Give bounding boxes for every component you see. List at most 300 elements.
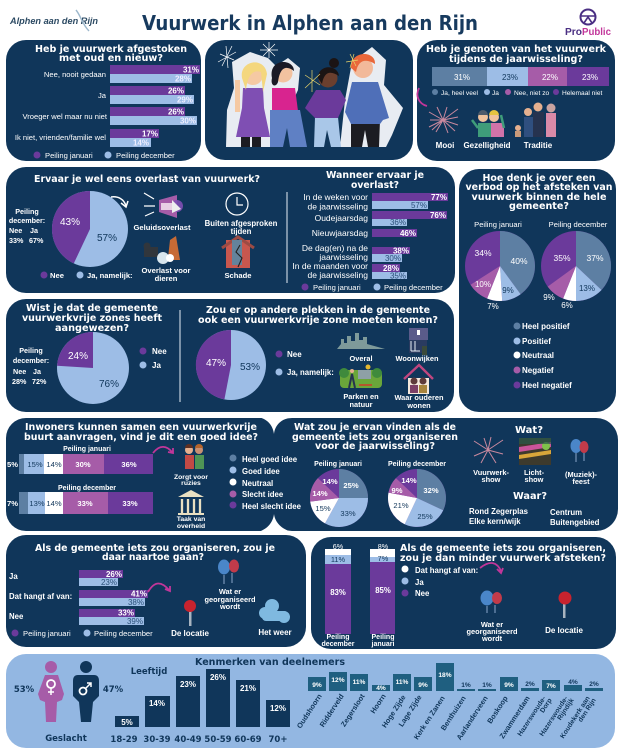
pie chart: januari: 25%	[343, 481, 359, 490]
label: Schade	[224, 271, 252, 280]
stacked column: januari: Peiling	[372, 634, 394, 641]
legend: Positief	[522, 337, 551, 346]
legend: Peiling januari	[313, 283, 361, 292]
note peiling december: 33%	[9, 236, 24, 245]
stacked bar: december: 14%	[46, 499, 62, 508]
legend: Heel negatief	[522, 381, 572, 390]
legend: Ja	[415, 578, 424, 587]
heading: Als de gemeente iets zou organiseren, zou je	[35, 543, 275, 554]
bar chart: kernen: 18%	[438, 672, 452, 679]
note peiling december: 67%	[29, 236, 44, 245]
note peiling december: Nee	[13, 367, 26, 376]
heading	[22, 303, 162, 334]
stacked bar: januari	[7, 446, 153, 474]
bar chart: 26%	[168, 86, 184, 96]
pie chart	[57, 332, 129, 404]
icon: pin	[558, 592, 572, 618]
heading	[400, 543, 606, 564]
label: Overlast voor	[142, 266, 191, 275]
stacked column: januari: 7%	[378, 554, 389, 563]
label: Vuurwerk-	[473, 468, 509, 477]
logo: Alphen aan den Rijn: Alphen aan den Rijn	[9, 16, 98, 27]
labels: kernen: Zwammerdam	[497, 694, 532, 740]
note peiling december: december:	[13, 356, 49, 365]
pie chart: januari: 15%	[315, 504, 331, 513]
bar chart: 26%	[106, 570, 122, 579]
bar chart	[9, 570, 148, 626]
label: De locatie	[171, 629, 209, 638]
panel: verbod	[459, 169, 616, 412]
locations: Centrum	[550, 508, 582, 517]
pie chart: 47%	[206, 358, 226, 369]
stacked column: januari: 85%	[375, 586, 391, 595]
icon: pets	[144, 236, 180, 264]
bar chart: leeftijd: 23%	[180, 680, 196, 689]
label: Zorgt voor	[174, 474, 208, 481]
note peiling december: Peiling	[15, 207, 39, 216]
label: Overal	[349, 354, 373, 363]
bar chart: wanneer: de jaarwisseling	[308, 202, 368, 212]
legend	[12, 629, 153, 638]
legend: Ja, heel veel	[441, 90, 479, 97]
stacked bar: december: 33%	[77, 499, 93, 508]
pie chart: december: Peiling december	[388, 461, 446, 468]
heading: gemeente iets zou organiseren	[292, 432, 458, 443]
legend: Ja	[152, 361, 161, 370]
pie chart	[196, 330, 266, 400]
labels: kernen: Ridderveld	[318, 692, 346, 729]
bar chart: wanneer: 28%	[383, 264, 399, 273]
note peiling december: 28%	[12, 377, 27, 386]
bar chart: wanneer: 77%	[431, 193, 447, 202]
legend: Heel goed idee	[242, 455, 298, 464]
heading: vuurwerkvrije zones heeft	[22, 313, 162, 324]
legend: Dat hangt af van:	[415, 566, 478, 575]
panel: illustration of four people with sparklers	[205, 40, 413, 160]
heading	[24, 422, 258, 443]
legend: Heel slecht idee	[242, 502, 302, 511]
locations: Rond Zegerplas	[469, 507, 529, 516]
bar chart: leeftijd	[110, 669, 290, 745]
pie chart: december: Peiling december	[549, 220, 608, 229]
panel: iets organiseren	[270, 418, 618, 531]
icon: curved arrow	[111, 197, 128, 207]
icon: pink arrow	[148, 584, 170, 592]
panel: vuurwerkvrije buurt	[6, 418, 302, 531]
pie chart: januari: 9%	[502, 286, 514, 295]
label	[177, 516, 205, 530]
sub-heading: wanneer: Wanneer ervaar je	[326, 170, 424, 181]
bar chart: 39%	[127, 617, 143, 626]
pie chart: december: 6%	[561, 301, 573, 310]
bar chart: wanneer: 36%	[390, 218, 406, 227]
heading	[292, 422, 458, 452]
bar chart: 26%	[168, 108, 184, 116]
heading: Wist je dat de gemeente	[26, 303, 158, 314]
label	[174, 474, 208, 487]
label: 53%	[14, 685, 35, 695]
bar chart: Vroeger wel maar nu niet	[22, 112, 108, 121]
icon: cloud	[259, 599, 290, 623]
label: Woonwijken	[396, 354, 439, 363]
heading: Inwoners kunnen samen een vuurwerkvrije	[25, 422, 257, 433]
stacked column: januari: 8%	[378, 542, 389, 551]
icon: park	[339, 364, 382, 388]
legend: Goed idee	[242, 467, 280, 476]
heading: buurt aanvragen, vind je dit een goed idee?	[24, 432, 258, 443]
label: Parken en	[343, 392, 379, 401]
pie chart: januari: Peiling januari	[474, 220, 522, 229]
icon: clock	[226, 193, 248, 215]
labels	[436, 141, 553, 150]
bar chart: kernen: 7%	[546, 683, 556, 690]
labels: kernen: Koudekerk aan	[559, 695, 592, 740]
stacked column: januari: januari	[371, 641, 395, 648]
stacked column: december: 6%	[333, 542, 344, 551]
bar chart: 17%	[142, 130, 158, 138]
pie chart: december	[541, 220, 611, 310]
panel: vuurwerkvrije zones	[6, 299, 454, 412]
heading: voor de jaarwisseling?	[315, 441, 435, 452]
legend: Nee	[287, 350, 302, 359]
icon: light show	[519, 438, 551, 465]
labels: kernen: Zegersloot	[339, 692, 367, 728]
legend: Neutraal	[242, 479, 273, 488]
bar chart: kernen: 2%	[589, 681, 599, 688]
bar chart: leeftijd: 12%	[270, 704, 286, 713]
stacked bar: januari: 14%	[46, 460, 62, 469]
bar chart: wanneer: de jaarwisseling	[308, 270, 368, 280]
bar chart: leeftijd: 30-39	[143, 735, 171, 745]
bar chart: Ik niet, vrienden/familie wel	[15, 133, 106, 142]
bar chart: wanneer: In de maanden voor	[292, 261, 368, 271]
stacked bar: januari: 36%	[121, 460, 137, 469]
bar chart: kernen: 12%	[331, 677, 345, 684]
pie chart: december	[388, 461, 446, 527]
legend	[302, 283, 443, 292]
icon: male	[73, 661, 99, 722]
label: Geluidsoverlast	[134, 223, 191, 232]
label: show	[525, 475, 544, 484]
panel: kenmerken van deelnemers	[6, 654, 615, 748]
legend: Peiling december	[384, 283, 443, 292]
heading: aangewezen?	[55, 323, 129, 334]
legend	[230, 454, 302, 511]
person 4	[345, 54, 389, 147]
pie chart: januari: Peiling januari	[314, 461, 362, 468]
pie chart: januari: 34%	[474, 248, 492, 258]
legend: Nee	[50, 271, 64, 280]
label	[205, 587, 256, 611]
legend	[140, 347, 167, 370]
label: natuur	[350, 400, 373, 409]
label: Waar ouderen	[394, 393, 444, 402]
stacked bar: januari: Peiling januari	[63, 446, 111, 453]
label	[343, 392, 379, 409]
legend	[276, 350, 334, 377]
label: overheid	[177, 523, 205, 530]
icon: balloons	[218, 560, 239, 584]
bar chart: 30%	[180, 116, 196, 126]
legend: Peiling december	[116, 151, 175, 160]
heading: verbod op het afsteken van	[466, 182, 613, 193]
labels: kernen: Rijndijk	[556, 697, 576, 722]
bar chart: wanneer: De dag(en) na de	[302, 243, 368, 253]
bar chart: wanneer: jaarwisseling	[318, 252, 368, 262]
icon: pin	[184, 600, 196, 626]
panel: overlast	[6, 167, 455, 293]
icon: traditie family	[515, 102, 556, 137]
icon: government building	[178, 490, 204, 515]
bar chart: 31%	[183, 66, 199, 74]
bar chart: leeftijd: 40-49	[174, 735, 202, 745]
person 2	[270, 62, 307, 147]
stacked column: december: december	[321, 641, 355, 648]
stacked bar: januari: 5%	[7, 460, 18, 469]
legend	[514, 322, 572, 390]
heading	[35, 44, 187, 64]
legend: Ja, namelijk:	[287, 368, 334, 377]
heading: Wat zou je ervan vinden als de	[294, 422, 456, 433]
sub-heading: wanneer	[326, 170, 424, 191]
locations: Elke kern/wijk	[469, 517, 521, 526]
stacked bar: december	[7, 485, 153, 514]
stacked column: december: 83%	[330, 588, 346, 597]
pie chart: december: 35%	[553, 253, 571, 263]
note peiling december: december:	[9, 216, 45, 225]
stacked bar: 22%	[542, 73, 558, 82]
heading	[198, 305, 438, 326]
heading	[426, 44, 607, 65]
labels: Mooi	[436, 141, 454, 150]
note peiling december	[9, 207, 45, 245]
pie chart: december: 14%	[401, 476, 417, 485]
labels: kernen: Oudshoorn	[295, 692, 324, 730]
panel: genoten van het vuurwerk	[417, 40, 615, 161]
label	[565, 470, 598, 486]
panel: naartoe gaan	[6, 535, 306, 647]
stacked bar: december: 13%	[29, 499, 45, 508]
labels: kernen: Boskoop	[485, 694, 510, 725]
label: ruzies	[181, 480, 201, 487]
heading	[35, 543, 275, 563]
heading: zou je dan minder vuurwerk afsteken?	[400, 553, 606, 564]
note peiling december: 72%	[32, 377, 47, 386]
label: wonen	[406, 401, 431, 410]
label: 47%	[103, 685, 124, 695]
heading: Hoe denk je over een	[482, 173, 596, 184]
logo: ProPublic: Pro	[565, 26, 582, 38]
heading: Kenmerken van deelnemers	[195, 657, 345, 668]
person 3	[305, 58, 346, 147]
pie chart	[52, 191, 128, 267]
pie chart: januari: 7%	[487, 302, 499, 311]
icon: arguing people	[185, 444, 204, 469]
stacked bar	[432, 67, 609, 86]
pie chart: 43%	[60, 217, 80, 228]
icon: damaged house	[222, 237, 254, 268]
pie chart: december: 32%	[423, 486, 439, 495]
note peiling december: Nee	[9, 226, 22, 235]
icon: pink arrow	[480, 563, 503, 573]
logo: ProPublic: Public	[582, 26, 611, 38]
label: Het weer	[258, 628, 292, 637]
locations	[469, 507, 600, 527]
bar chart: wanneer: 35%	[390, 272, 406, 280]
labels: kernen: Hoge Zijde	[380, 693, 408, 729]
label: feest	[572, 477, 590, 486]
sparklers	[218, 42, 358, 92]
stacked column: december: 11%	[331, 555, 346, 564]
labels: kernen: Aarlanderveen	[455, 694, 490, 742]
heading: met oud en nieuw?	[59, 53, 163, 64]
bar chart: wanneer: Oudejaarsdag	[315, 213, 368, 223]
legend: Nee	[415, 589, 430, 598]
icon: balloons	[570, 439, 588, 462]
bar chart: 14%	[133, 138, 149, 148]
legend: Heel positief	[522, 322, 570, 331]
pie chart: januari: 14%	[322, 477, 338, 486]
label: Wat er	[481, 620, 503, 629]
bar chart: wanneer: 38%	[393, 246, 409, 256]
pie chart: 76%	[99, 379, 119, 390]
stacked bar: 23%	[582, 73, 598, 82]
person 1	[235, 62, 270, 147]
bar chart: wanneer: 57%	[411, 201, 427, 210]
bar chart: kernen: 4%	[376, 685, 386, 692]
label: wordt	[481, 634, 503, 643]
label: georganiseerd	[467, 627, 518, 636]
pie chart: 57%	[97, 233, 117, 244]
pie chart: december: 21%	[393, 501, 409, 510]
bar chart: 29%	[177, 96, 193, 104]
labels: kernen: Kerk en Zanen	[412, 694, 447, 741]
labels: Gezelligheid	[463, 141, 511, 150]
legend: Peiling januari	[45, 151, 93, 160]
stacked bar: december: 7%	[7, 499, 18, 508]
labels: kernen: Hazerswoude-	[517, 695, 548, 738]
heading: wat: Wat?	[515, 425, 543, 436]
panel: vuurwerk afgestoken	[6, 40, 201, 161]
bar chart: leeftijd: 50-59	[204, 735, 232, 745]
bar chart: 28%	[175, 74, 191, 84]
legend: Peiling december	[94, 629, 153, 638]
bar chart: wanneer: 76%	[430, 211, 446, 220]
label: Taak van	[177, 516, 205, 523]
stacked bar: 23%	[502, 73, 518, 82]
bar chart: kernen: 9%	[504, 682, 514, 689]
icon: balloons	[480, 590, 502, 613]
pie chart: januari: 40%	[510, 256, 528, 266]
heading: Zou er op andere plekken in de gemeente	[206, 305, 430, 316]
pie chart: december: 9%	[543, 293, 555, 302]
labels: kernen: Hazerswoude-	[539, 695, 570, 738]
stacked column: januari	[370, 542, 395, 648]
logo: Alphen aan den Rijn	[9, 10, 98, 31]
label	[205, 219, 278, 236]
panel: minder vuurwerk afsteken	[311, 537, 616, 649]
bar chart: 23%	[101, 578, 117, 587]
icon: city skyline	[337, 333, 385, 349]
pie chart: 53%	[240, 362, 260, 373]
note peiling december: Peiling	[19, 346, 43, 355]
legend: Ja, namelijk:	[87, 271, 133, 280]
label: leeftijd: Leeftijd	[131, 667, 167, 677]
icon: gezelligheid	[472, 110, 504, 137]
bar chart: kernen	[308, 663, 603, 692]
halo	[226, 47, 403, 147]
pie chart: januari: 33%	[340, 509, 356, 518]
legend	[34, 151, 175, 160]
label: geslacht: Geslacht	[45, 734, 87, 744]
label: (Muziek)-	[565, 470, 598, 479]
labels: kernen: Lage Zijde	[396, 693, 424, 728]
icon: pink arrow	[153, 447, 173, 453]
bar chart: leeftijd: 21%	[240, 684, 256, 693]
bar chart: kernen: 9%	[418, 682, 428, 689]
legend: Peiling januari	[23, 629, 71, 638]
bar chart: Dat hangt af van:	[9, 592, 72, 601]
bar chart: kernen: 1%	[461, 682, 471, 689]
icon: female	[38, 661, 64, 722]
bar chart: kernen: 9%	[312, 682, 322, 689]
heading: Ervaar je wel eens overlast van vuurwerk?	[34, 174, 260, 185]
legend	[432, 89, 602, 97]
title: Vuurwerk in Alphen aan den Rijn	[142, 11, 478, 35]
label: wordt	[219, 602, 241, 611]
pie chart: december: 9%	[392, 486, 403, 495]
label: georganiseerd	[205, 595, 256, 604]
labels: Traditie	[524, 141, 553, 150]
bar chart: Ja	[98, 91, 107, 100]
note peiling december	[12, 346, 49, 386]
label	[142, 266, 191, 283]
label: tijden	[231, 227, 252, 236]
heading: ook een vuurwerkvrije zone moeten komen?	[198, 315, 438, 326]
icon: firework	[474, 437, 503, 463]
icon: woonwijk	[409, 328, 428, 355]
labels: kernen: den Rijn	[577, 697, 598, 724]
heading: Heb je vuurwerk afgestoken	[35, 44, 187, 55]
bar chart: kernen: 4%	[568, 679, 578, 686]
bar chart: 33%	[118, 608, 134, 618]
heading: daar naartoe gaan?	[102, 552, 204, 563]
legend: Ja	[492, 90, 499, 97]
pie chart: januari	[310, 461, 368, 527]
label: De locatie	[545, 626, 583, 635]
pie chart: december: 25%	[417, 512, 433, 521]
label	[394, 393, 444, 410]
heading: waar: Waar?	[513, 491, 547, 502]
heading	[466, 173, 613, 212]
stacked bar: 31%	[454, 73, 470, 82]
icon: megaphone	[144, 193, 183, 218]
bar chart: leeftijd: 60-69	[234, 735, 262, 745]
bar chart: 41%	[131, 590, 147, 598]
bar chart	[15, 65, 200, 148]
pie chart: 24%	[68, 351, 88, 362]
legend: Nee, niet zo	[514, 90, 550, 97]
pie chart: december: 13%	[579, 284, 595, 293]
legend: Slecht idee	[242, 490, 284, 499]
icon: fireworks	[429, 107, 458, 133]
stacked bar: december: 33%	[122, 499, 138, 508]
labels: kernen: Benthuizen	[439, 694, 468, 732]
sub-heading: wanneer: overlast?	[351, 180, 399, 191]
bar chart: wanneer	[292, 192, 448, 280]
bar chart: wanneer: In de weken voor	[303, 192, 368, 202]
label: Licht-	[524, 468, 545, 477]
